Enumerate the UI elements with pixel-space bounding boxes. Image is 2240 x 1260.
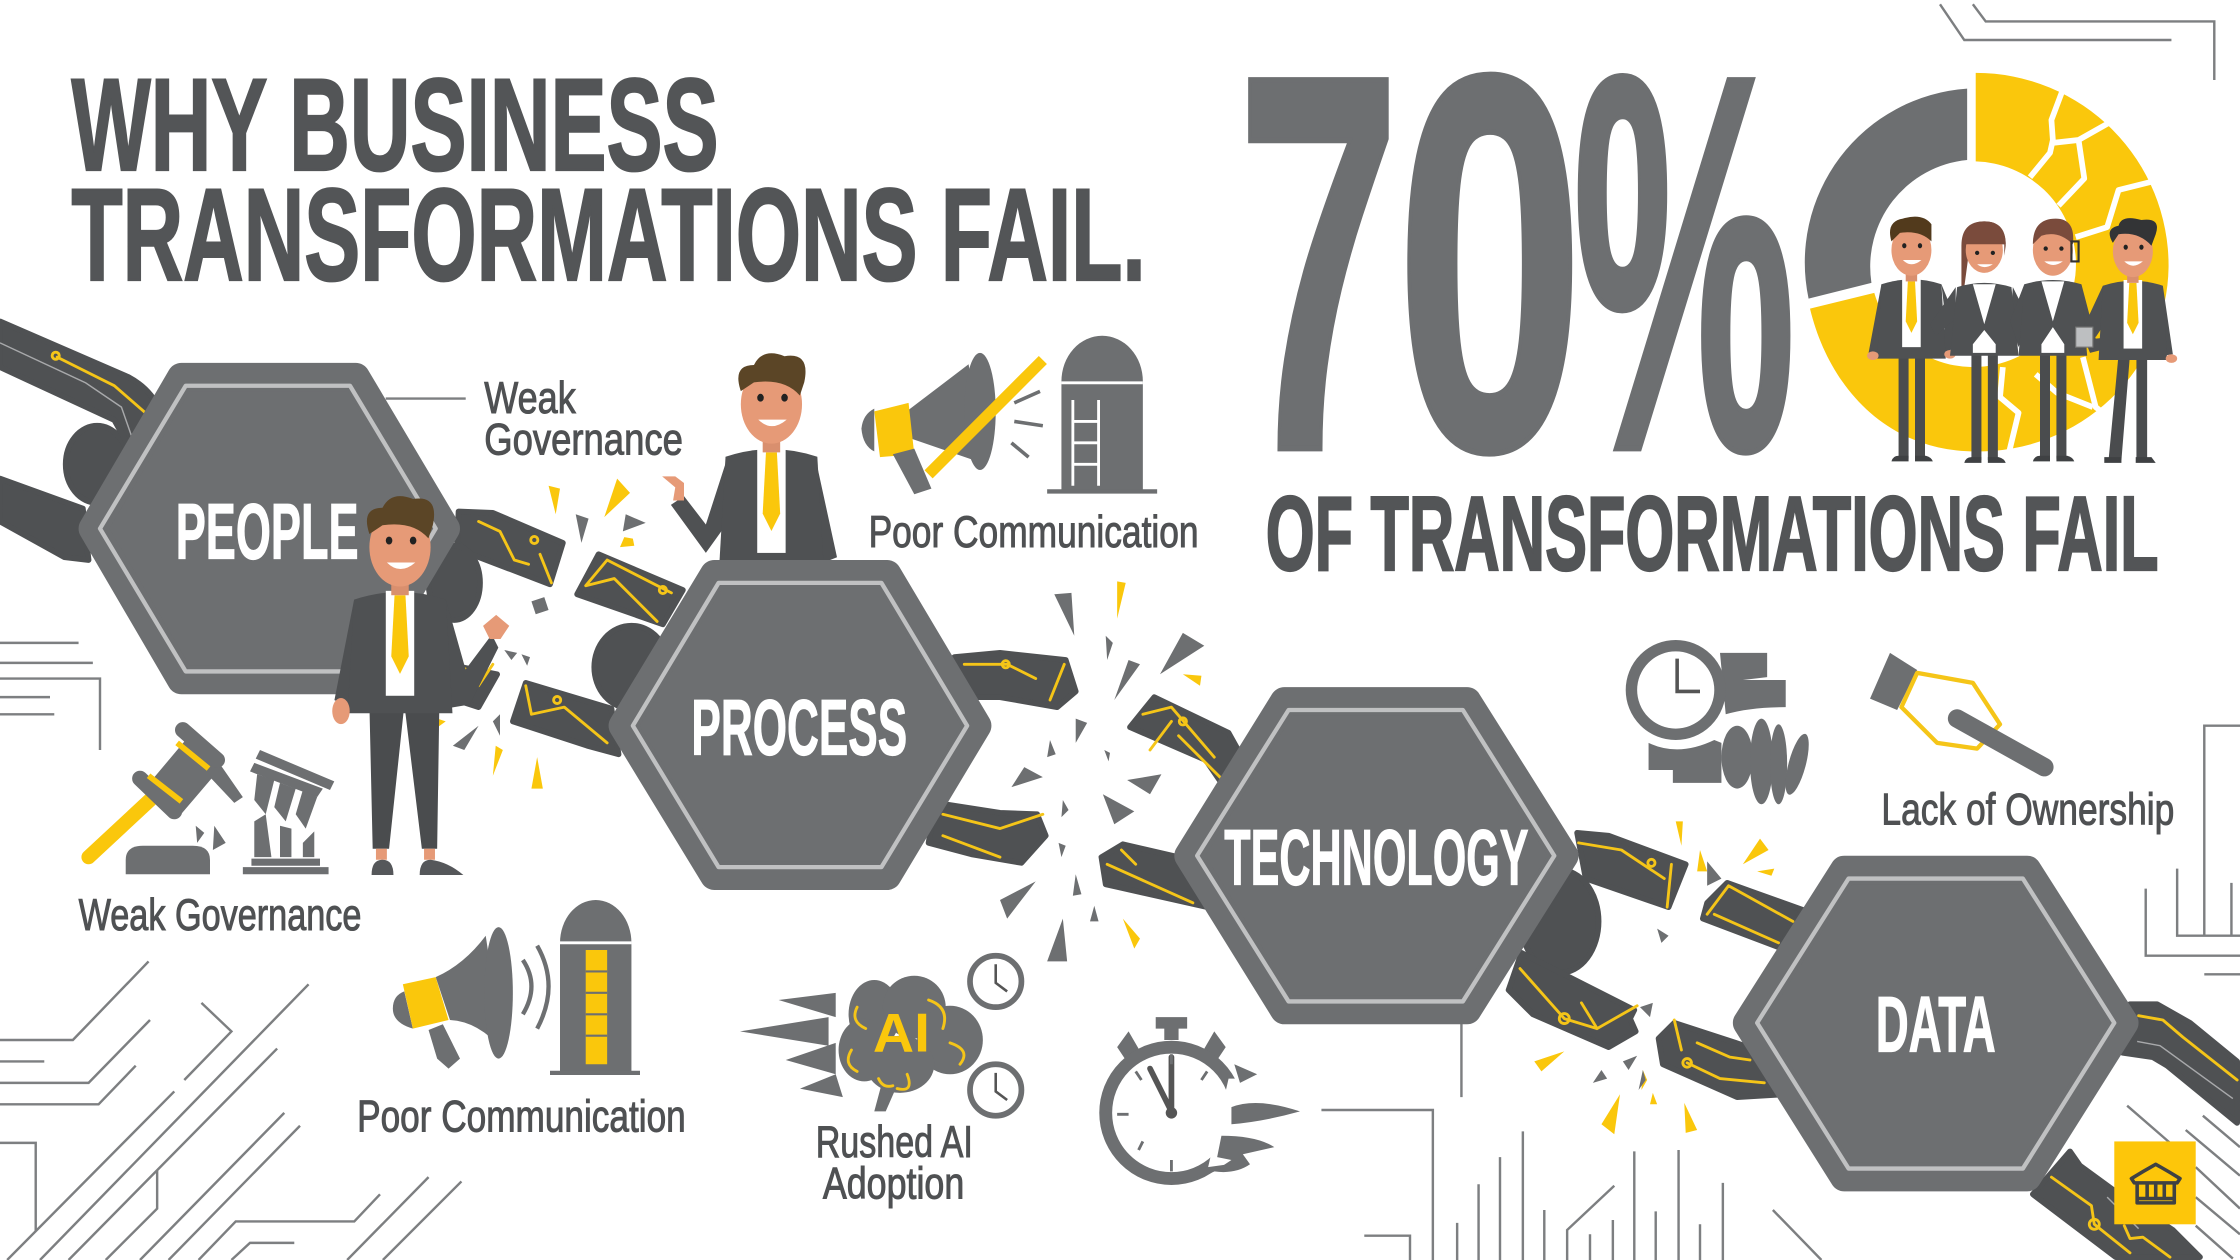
hexagon: people — [93, 377, 446, 680]
label: poor communication top: Poor Communication — [869, 508, 1199, 557]
chain: broken links — [0, 321, 2237, 1257]
title: TRANSFORMATIONS FAIL. — [71, 161, 1146, 308]
title: WHY BUSINESS — [71, 51, 719, 198]
hexagon: process: PROCESS — [691, 683, 907, 771]
icon: crossed megaphone and silo — [861, 336, 1157, 494]
hexagon: technology: TECHNOLOGY — [1224, 813, 1529, 901]
hexagon: data: DATA — [1876, 980, 1996, 1068]
icon: stopwatch — [1106, 1017, 1300, 1179]
hexagon: process — [623, 574, 977, 876]
icon: megaphone and silo — [393, 900, 640, 1073]
title — [71, 51, 1146, 308]
label: lack of ownership: Lack of Ownership — [1881, 785, 2174, 834]
person: lower presenter — [332, 496, 509, 875]
hexagon: technology — [1189, 701, 1564, 1010]
label: poor communication bottom: Poor Communication — [357, 1092, 686, 1141]
label: weak governance callout — [386, 374, 683, 464]
person: upper presenter — [662, 353, 837, 570]
label: rushed AI adoption — [816, 1118, 973, 1209]
hexagon: people: PEOPLE — [176, 488, 359, 576]
hexagon: data — [1747, 870, 2124, 1177]
icon: brain with AI and clocks: AI — [873, 1002, 930, 1063]
label: weak governance: Weak Governance — [79, 891, 361, 940]
icon: brain with AI and clocks — [740, 956, 1021, 1116]
label: rushed AI adoption: Rushed AI — [816, 1118, 973, 1167]
label: rushed AI adoption: Adoption — [823, 1160, 964, 1209]
shards — [433, 479, 1774, 1134]
badge: bank icon — [2114, 1141, 2196, 1224]
icon: clock and hands — [1631, 646, 1814, 804]
icon: hand with lack of ownership — [1870, 653, 2044, 767]
icon: gavel and broken pillar — [89, 730, 334, 874]
team of four people — [1867, 217, 2177, 463]
label: weak governance callout: Weak — [484, 374, 576, 423]
donut chart: 70 percent cracked — [1805, 73, 2169, 454]
label: weak governance callout: Governance — [484, 415, 683, 464]
